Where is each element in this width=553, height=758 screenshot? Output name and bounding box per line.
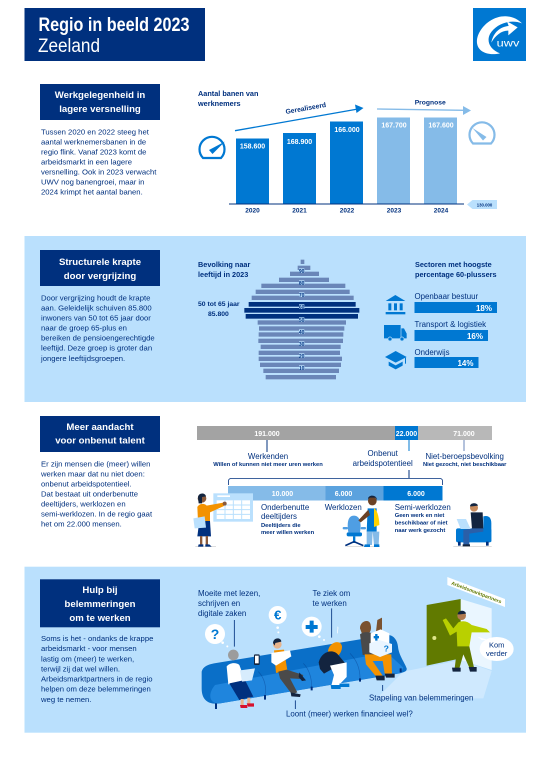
section title: onbenut talent: voor onbenut talent — [55, 436, 146, 446]
label: niet-beroepsbevolking — [423, 452, 507, 468]
label: moeite met lezen: Moeite met lezen, — [198, 589, 260, 598]
arrow: prognose — [377, 100, 471, 115]
label: semi-werklozen: naar werk gezocht — [395, 528, 445, 534]
thought bubble: medical cross — [302, 617, 325, 641]
pyramid heading: leeftijd in 2023 — [198, 270, 248, 279]
text block: werkgelegenheid — [41, 127, 157, 196]
text block: belemmeringen: lastig om (meer) te werken, — [41, 654, 134, 663]
label: onderbenutte deeltijders: deeltijders — [261, 512, 297, 521]
text block: werkgelegenheid: versnelling. Ook in 2023 verwacht — [41, 167, 157, 176]
couch — [202, 635, 407, 709]
label: niet-beroepsbevolking: Niet-beroepsbevolking — [425, 452, 504, 461]
text block: krapte: jongere leeftijdsgroepen. — [40, 354, 125, 363]
section title: werkgelegenheid: lagere versnelling — [59, 104, 141, 115]
label: stapeling: Stapeling van belemmeringen — [369, 694, 473, 702]
pyramid age labels: 30 — [299, 342, 305, 348]
arrow: gerealiseerd: Gerealiseerd — [285, 102, 327, 116]
text block: krapte: Door vergrijzing houdt de krapte — [41, 293, 150, 302]
text block: belemmeringen: helpen om deze belemmeringen — [41, 684, 151, 694]
axis with years: 2020 — [245, 208, 260, 214]
pyramid age labels: 50 — [299, 318, 305, 324]
text block: onbenut talent: semi-werklozen. In de regio gaat — [41, 509, 153, 518]
label: moeite met lezen — [198, 589, 260, 618]
text block: belemmeringen: Arbeidsmarktpartners in de regio — [41, 674, 153, 683]
text block: krapte: bereiken de pensioengerechtigde — [41, 333, 155, 342]
bars: 158.600 — [240, 144, 265, 151]
text block: belemmeringen: weg te nemen. — [40, 695, 91, 704]
label: onderbenutte deeltijders: meer willen werken — [261, 530, 315, 536]
section title: krapte — [40, 250, 160, 286]
label: onbenut arbeidspotentieel — [353, 449, 413, 468]
axis tag: 130.000 — [467, 200, 497, 209]
text block: krapte: leeftijd. Deze groep is groter dan — [41, 343, 152, 352]
text block: werkgelegenheid: aantal werknemersbanen in de — [41, 137, 146, 146]
sectors heading: percentage 60-plussers — [415, 270, 497, 279]
sector: openbaar bestuur — [414, 292, 497, 313]
axis with years: 2021 — [292, 208, 307, 214]
section title: werkgelegenheid — [40, 84, 160, 120]
speech bubble: kom verder: Kom — [489, 640, 504, 649]
icon: gauge realised — [200, 137, 225, 158]
pyramid callout: 50 tot 65 jaar — [198, 301, 240, 318]
text block: werkgelegenheid: 2024 krimpt het aantal banen. — [41, 188, 143, 196]
pyramid heading — [198, 260, 250, 279]
bars: 168.900 — [287, 139, 312, 146]
illustration: woman with chart — [193, 493, 253, 547]
illustration: person with office chair — [343, 496, 380, 547]
person: reading woman — [227, 650, 260, 708]
label: werklozen: Werklozen — [325, 503, 362, 512]
header title block — [24, 8, 205, 61]
label: loont werken: Loont (meer) werken financieel wel? — [286, 710, 413, 718]
section title: onbenut talent — [40, 416, 160, 452]
person: sick person with hood — [319, 627, 349, 689]
speech bubble: kom verder — [477, 637, 514, 661]
chart: breakdown bar: 10.000 — [272, 491, 293, 498]
door with sign — [427, 577, 505, 670]
pyramid age labels: 80 — [299, 281, 305, 287]
section title: onbenut talent: Meer aandacht — [66, 422, 134, 433]
axis tag: 130.000: 130.000 — [477, 202, 493, 207]
chart: breakdown bar: 6.000 — [335, 491, 352, 498]
label: te ziek: te werken — [312, 599, 347, 608]
arrow: prognose: Prognose — [415, 100, 446, 107]
connector lines — [234, 608, 383, 709]
text block: werkgelegenheid: arbeidsmarkt in een lagere — [41, 157, 132, 166]
sectors heading: Sectoren met hoogste — [415, 260, 492, 269]
text block: onbenut talent: werken maar dat nu niet doen: — [40, 469, 145, 478]
axis with years: 2023 — [387, 208, 402, 214]
thought bubble: euro — [269, 606, 287, 633]
text block: onbenut talent: deeltijders, werklozen en — [41, 499, 126, 508]
thought bubble: question: ? — [211, 626, 219, 642]
person: stacking boxes — [360, 618, 395, 680]
label: semi-werklozen: Geen werk en niet — [395, 513, 444, 519]
sector: transport: 16% — [467, 332, 483, 341]
icon: graduation cap — [385, 351, 407, 369]
sector: onderwijs — [414, 348, 478, 368]
speech bubble: kom verder: verder — [486, 649, 508, 658]
label: onderbenutte deeltijders — [261, 503, 315, 536]
bars: 167.700 — [381, 123, 407, 130]
text block: werkgelegenheid: Tussen 2020 en 2022 steeg het — [41, 127, 150, 136]
text block: krapte — [40, 293, 155, 363]
text block: werkgelegenheid: UWV nog banengroei, maar in — [41, 178, 144, 186]
illustration: waiting room and door — [202, 577, 514, 709]
text block: onbenut talent: onbenut arbeidspotentieel. — [41, 479, 132, 488]
axis with years — [229, 204, 464, 214]
text block: belemmeringen: Soms is het - ondanks de krappe — [41, 634, 153, 643]
section title: belemmeringen: belemmeringen — [65, 599, 136, 610]
pyramid age labels: 60 — [299, 305, 305, 311]
label: onbenut arbeidspotentieel: arbeidspotentieel — [353, 459, 413, 468]
icon: gauge forecast — [469, 122, 494, 144]
section title: belemmeringen: Hulp bij — [82, 585, 118, 596]
sector: onderwijs: Onderwijs — [414, 348, 450, 357]
pyramid age labels — [299, 269, 305, 372]
chart: population pyramid — [244, 260, 359, 379]
illustration: person on armchair with laptop — [453, 503, 492, 547]
section title: krapte: door vergrijzing — [64, 271, 136, 282]
section title: werkgelegenheid: Werkgelegenheid in — [55, 90, 145, 101]
label: te ziek — [312, 589, 351, 608]
text block: belemmeringen: arbeidsmarkt - voor mensen — [41, 644, 137, 653]
section title: belemmeringen — [40, 579, 160, 627]
pyramid callout: 50 tot 65 jaar: 85.800 — [208, 311, 229, 318]
label: werkenden: Werkenden — [248, 452, 288, 461]
bar chart: aantal banen — [197, 89, 497, 214]
text block: krapte: naar de groep 65-plus en — [41, 323, 127, 332]
person: stacking boxes: ? — [384, 643, 389, 653]
sector: onderwijs: 14% — [457, 359, 474, 368]
chart: population bar: 191.000 — [254, 431, 280, 438]
person: welcoming man — [443, 611, 490, 672]
icon: UWV logo: uwv — [497, 38, 519, 49]
sector: transport: Transport & logistiek — [414, 320, 486, 329]
text block: onbenut talent: het om 22.000 mensen. — [41, 519, 122, 528]
sector: openbaar bestuur: Openbaar bestuur — [414, 292, 478, 301]
text block: krapte: inwoners van 50 tot 65 jaar door — [41, 313, 151, 322]
sector: transport — [414, 320, 488, 341]
icon: government building — [386, 295, 405, 314]
pyramid age labels: 20 — [299, 354, 305, 360]
light spill from door — [377, 660, 492, 698]
label: niet-beroepsbevolking: Niet gezocht, niet beschikbaar — [423, 462, 507, 468]
label: te ziek: Te ziek om — [312, 589, 351, 598]
chart: population bar: 22.000 — [396, 431, 417, 438]
pyramid age labels: 10 — [299, 366, 305, 372]
chart: breakdown bar: 6.000 — [407, 491, 425, 498]
section title: belemmeringen: om te werken — [69, 613, 131, 624]
icon: UWV logo — [473, 8, 526, 61]
chart: breakdown bar — [228, 486, 442, 500]
text block: onbenut talent: Dat bestaat uit onderbenutte — [41, 489, 138, 498]
thought bubble: question — [205, 624, 228, 647]
panel: structurele krapte — [24, 236, 526, 402]
pyramid callout: 50 tot 65 jaar: 50 tot 65 jaar — [198, 301, 240, 308]
label: moeite met lezen: digitale zaken — [198, 609, 246, 618]
bars: 166.000 — [334, 127, 360, 134]
text block: werkgelegenheid: regio flink. Vanaf 2023 komt de — [41, 147, 146, 156]
chart: population bar — [197, 426, 492, 440]
text block: onbenut talent — [40, 459, 153, 528]
axis with years: 2024 — [434, 208, 449, 214]
chart heading: werknemers — [197, 99, 241, 108]
sectors heading — [415, 260, 497, 279]
text block: belemmeringen: terwijl zij dat wel willen. — [41, 664, 120, 673]
label: moeite met lezen: schrijven en — [198, 599, 240, 608]
text block: belemmeringen — [40, 634, 153, 704]
bars: 167.600 — [428, 123, 454, 130]
label: semi-werklozen — [395, 503, 451, 534]
arrow: gerealiseerd — [235, 102, 364, 131]
chart: population bar: 71.000 — [453, 431, 475, 438]
door with sign: Arbeidsmarktpartners — [450, 581, 503, 605]
label: werkenden — [213, 452, 323, 468]
text block: krapte: aan. Geleidelijk schuiven 85.800 — [41, 303, 152, 312]
label: semi-werklozen: beschikbaar of niet — [395, 520, 448, 526]
chart heading: Aantal banen van — [198, 89, 258, 98]
panel: hulp bij belemmeringen — [24, 567, 526, 733]
thought bubble: euro: € — [274, 608, 282, 623]
label: werkenden: Willen of kunnen niet meer uren werken — [213, 462, 323, 468]
label: onderbenutte deeltijders: Deeltijders die — [261, 523, 301, 529]
label: semi-werklozen: Semi-werklozen — [395, 503, 451, 512]
pyramid age labels: 70 — [299, 293, 305, 299]
sector: openbaar bestuur: 18% — [476, 304, 492, 313]
person: man with arms crossed — [271, 638, 306, 697]
icon: truck — [384, 325, 407, 341]
pyramid heading: Bevolking naar — [198, 260, 250, 269]
chart heading — [197, 89, 258, 108]
header title block: Zeeland — [38, 36, 100, 57]
pyramid age labels: 90 — [299, 269, 305, 275]
axis with years: 2022 — [340, 208, 355, 214]
section title: krapte: Structurele krapte — [59, 257, 141, 268]
bars — [236, 118, 457, 204]
header title block: Regio in beeld 2023 — [38, 15, 190, 36]
pyramid age labels: 40 — [299, 330, 305, 336]
label: onbenut arbeidspotentieel: Onbenut — [368, 449, 399, 458]
text block: onbenut talent: Er zijn mensen die (meer) willen — [41, 459, 150, 468]
connector lines — [228, 440, 464, 485]
label: onderbenutte deeltijders: Onderbenutte — [261, 503, 310, 512]
